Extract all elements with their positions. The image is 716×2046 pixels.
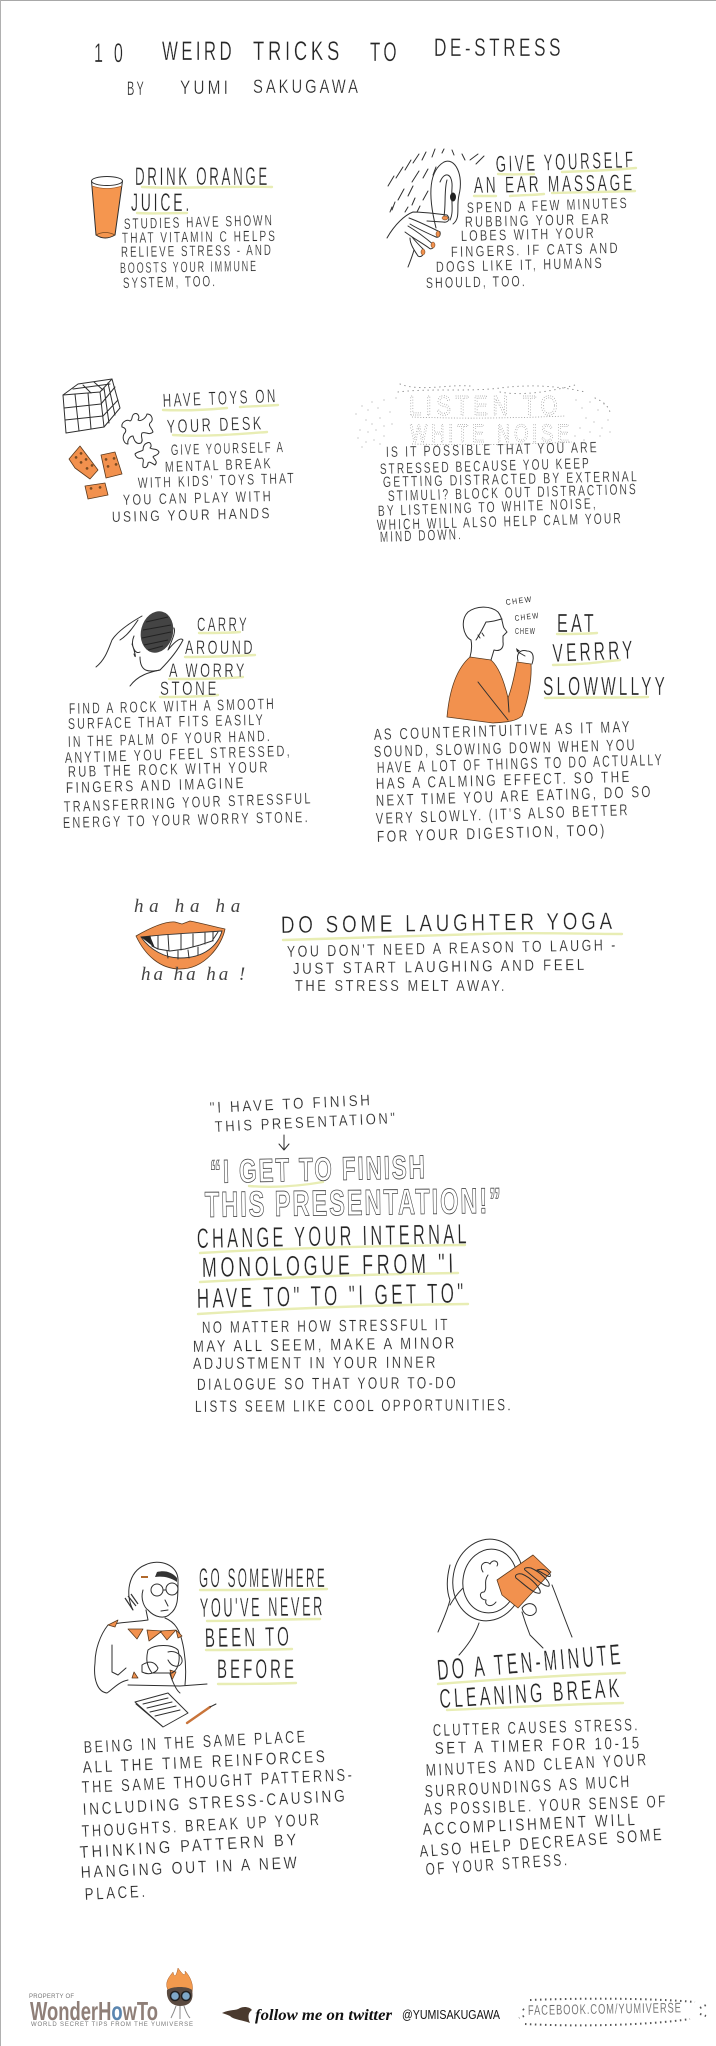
body text: SURFACE THAT FITS EASILY	[68, 712, 265, 733]
body text: SYSTEM, TOO.	[123, 273, 217, 292]
footer: WonderHowTo logo: WonderHowTo	[30, 1996, 158, 2026]
body text: FOR YOUR DIGESTION, TOO)	[377, 822, 607, 846]
heading: STONE	[160, 679, 219, 700]
body text: BEING IN THE SAME PLACE	[83, 1727, 308, 1757]
body text: THE SAME THOUGHT PATTERNS-	[81, 1765, 355, 1797]
body text: YOU DON'T NEED A REASON TO LAUGH -	[287, 937, 618, 961]
chew labels: CHEW	[514, 611, 540, 623]
panel: eat slowly	[374, 595, 668, 846]
heading: CARRY	[197, 615, 249, 636]
title: TRICKS	[253, 36, 343, 66]
heading: I get to finish: “I GET TO FINISH	[209, 1148, 427, 1190]
body text: YOU CAN PLAY WITH	[123, 488, 273, 509]
body text: NO MATTER HOW STRESSFUL IT	[202, 1316, 450, 1337]
footer: WonderHowTo logo	[29, 1968, 193, 2028]
body text: RUB THE ROCK WITH YOUR	[68, 759, 270, 781]
panel: go somewhere new: YOU'VE NEVER	[200, 1591, 325, 1623]
body text: STUDIES HAVE SHOWN	[124, 212, 274, 233]
heading: EAT	[557, 608, 597, 638]
heading: JUICE.	[131, 189, 192, 217]
body text: JUST START LAUGHING AND FEEL	[293, 957, 587, 978]
body text: LOBES WITH YOUR	[461, 225, 596, 245]
heading: AROUND	[185, 638, 255, 659]
footer: follow on twitter	[222, 2007, 500, 2024]
byline: BY	[127, 79, 146, 100]
icon: laughing mouth	[136, 921, 225, 969]
body text: BOOSTS YOUR IMMUNE	[120, 258, 258, 277]
body text: MIND DOWN.	[380, 526, 463, 546]
footer: WonderHowTo logo: WORLD SECRET TIPS FROM THE YUMIVERSE	[31, 2022, 193, 2028]
body text: ENERGY TO YOUR WORRY STONE.	[63, 809, 310, 832]
body text: RELIEVE STRESS - AND	[121, 242, 273, 261]
laughter script bottom: ha ha ha !	[141, 964, 246, 985]
heading: dotted title: WHITE NOISE	[410, 420, 573, 448]
body text: HANGING OUT IN A NEW	[80, 1853, 300, 1882]
body text: SHOULD, TOO.	[426, 273, 527, 292]
icon: woman with mug and notebook	[95, 1562, 216, 1727]
chew labels	[505, 595, 540, 636]
body text: TRANSFERRING YOUR STRESSFUL	[64, 790, 313, 816]
title: DE-STRESS	[434, 34, 564, 62]
panel: ear massage	[387, 146, 636, 292]
quote: have to: "I HAVE TO FINISH	[209, 1092, 373, 1117]
body text: HAS A CALMING EFFECT. SO THE	[376, 769, 632, 793]
heading: BEFORE	[217, 1654, 297, 1684]
heading: DRINK ORANGE	[135, 163, 270, 191]
body text: MENTAL BREAK	[165, 455, 273, 476]
byline: SAKUGAWA	[253, 77, 361, 98]
body text	[79, 1727, 355, 1904]
icon: orange toy bricks	[69, 446, 122, 499]
body text: BY LISTENING TO WHITE NOISE,	[378, 495, 598, 520]
icon: bird	[222, 2007, 252, 2023]
quote: have to	[209, 1092, 398, 1136]
body text	[120, 212, 277, 292]
body text	[374, 719, 664, 846]
body text: IS IT POSSIBLE THAT YOU ARE	[386, 439, 599, 461]
icon: person chewing in orange sweater	[447, 607, 533, 723]
icon: rubik's cube	[63, 379, 120, 433]
body text: THINKING PATTERN BY	[79, 1830, 300, 1862]
body text: INCLUDING STRESS-CAUSING	[82, 1786, 348, 1819]
panel: cleaning break	[419, 1534, 668, 1879]
body text: DOGS LIKE IT, HUMANS	[436, 255, 604, 276]
icon: flaming mascot	[167, 1968, 193, 2019]
body text: USING YOUR HANDS	[112, 505, 272, 526]
body text: ANYTIME YOU FEEL STRESSED,	[65, 743, 292, 767]
body text	[287, 937, 618, 995]
body text	[419, 1715, 668, 1879]
heading	[474, 146, 636, 198]
panel: laughter yoga	[134, 896, 622, 995]
heading: I get to finish: THIS PRESENTATION!”	[205, 1180, 503, 1225]
title: TO	[370, 37, 400, 67]
heading	[131, 163, 272, 217]
body text: ALL THE TIME REINFORCES	[82, 1747, 328, 1777]
body text	[193, 1316, 513, 1416]
body text	[63, 696, 313, 832]
heading: dotted title: LISTEN TO	[409, 390, 562, 421]
heading: change monologue: CHANGE YOUR INTERNAL	[197, 1218, 470, 1254]
body text: FINGERS AND IMAGINE	[66, 775, 246, 797]
heading: YOUR DESK	[166, 413, 264, 438]
icon: hands holding stone	[96, 608, 183, 686]
panel: toys on desk	[63, 379, 296, 526]
body text: SET A TIMER FOR 10-15	[435, 1733, 642, 1758]
footer: facebook badge	[519, 1999, 706, 2025]
heading: change monologue: HAVE TO" TO "I GET TO"	[196, 1277, 467, 1314]
body text: FIND A ROCK WITH A SMOOTH	[69, 696, 276, 718]
body text: WITH KIDS' TOYS THAT	[138, 470, 296, 492]
body text: GIVE YOURSELF A	[171, 439, 285, 459]
body text: PLACE.	[84, 1882, 148, 1904]
panel: drink orange juice	[92, 163, 277, 292]
heading: change monologue: MONOLOGUE FROM "I	[202, 1248, 457, 1283]
heading: BEEN TO	[205, 1621, 292, 1653]
arrow down	[279, 1135, 289, 1150]
panel: worry stone	[63, 608, 313, 832]
body text: LISTS SEEM LIKE COOL OPPORTUNITIES.	[195, 1396, 513, 1416]
heading	[160, 615, 255, 700]
byline: YUMI	[180, 78, 231, 99]
panel: go somewhere new	[79, 1562, 355, 1904]
body text: STRESSED BECAUSE YOU KEEP	[380, 455, 591, 478]
icon: ear and hand	[387, 149, 484, 267]
body text: OF YOUR STRESS.	[425, 1850, 570, 1879]
body text	[377, 439, 639, 546]
quote: have to: THIS PRESENTATION"	[214, 1110, 398, 1136]
icon: glass of orange juice	[92, 176, 122, 238]
footer: follow on twitter: follow me on twitter	[255, 2007, 393, 2024]
body text: SURROUNDINGS AS MUCH	[424, 1772, 632, 1801]
heading	[436, 1639, 625, 1714]
body text: ADJUSTMENT IN YOUR INNER	[193, 1354, 438, 1373]
icon: puzzle pieces	[122, 414, 159, 468]
body text: DIALOGUE SO THAT YOUR TO-DO	[197, 1374, 458, 1394]
body text	[112, 439, 296, 526]
laughter script top: ha ha ha	[134, 896, 241, 917]
chew labels: CHEW	[505, 595, 533, 607]
heading	[162, 386, 278, 438]
panel: change internal monologue	[193, 1092, 513, 1416]
title: 1 0	[94, 38, 126, 68]
body text: MAY ALL SEEM, MAKE A MINOR	[193, 1334, 457, 1356]
body text: SPEND A FEW MINUTES	[467, 195, 629, 217]
body text: THE STRESS MELT AWAY.	[295, 978, 507, 995]
byline	[127, 77, 361, 100]
heading: HAVE TOYS ON	[162, 386, 278, 412]
body text: THAT VITAMIN C HELPS	[122, 228, 277, 247]
chew labels: CHEW	[515, 627, 536, 636]
footer: WonderHowTo logo: PROPERTY OF	[29, 1994, 74, 2000]
body text: ACCOMPLISHMENT WILL	[422, 1810, 638, 1839]
heading: DO SOME LAUGHTER YOGA	[281, 908, 616, 939]
title: WEIRD	[162, 36, 235, 66]
heading: VERRRY	[552, 634, 636, 668]
heading	[543, 608, 668, 701]
body text: IN THE PALM OF YOUR HAND.	[68, 728, 272, 751]
body text: FINGERS. IF CATS AND	[451, 240, 620, 261]
heading	[199, 1563, 327, 1684]
panel: go somewhere new: GO SOMEWHERE	[199, 1563, 327, 1593]
heading: change monologue	[196, 1218, 470, 1314]
body text	[426, 195, 629, 292]
icon: washing plate with sponge	[438, 1534, 572, 1655]
heading: dotted title	[356, 384, 610, 448]
heading: I get to finish	[205, 1148, 503, 1225]
footer: follow on twitter: @YUMISAKUGAWA	[402, 2007, 500, 2022]
body text: THOUGHTS. BREAK UP YOUR	[81, 1810, 322, 1841]
body text: RUBBING YOUR EAR	[465, 211, 611, 231]
title	[94, 34, 564, 68]
panel: white noise	[356, 384, 639, 546]
heading: A WORRY	[169, 661, 247, 682]
